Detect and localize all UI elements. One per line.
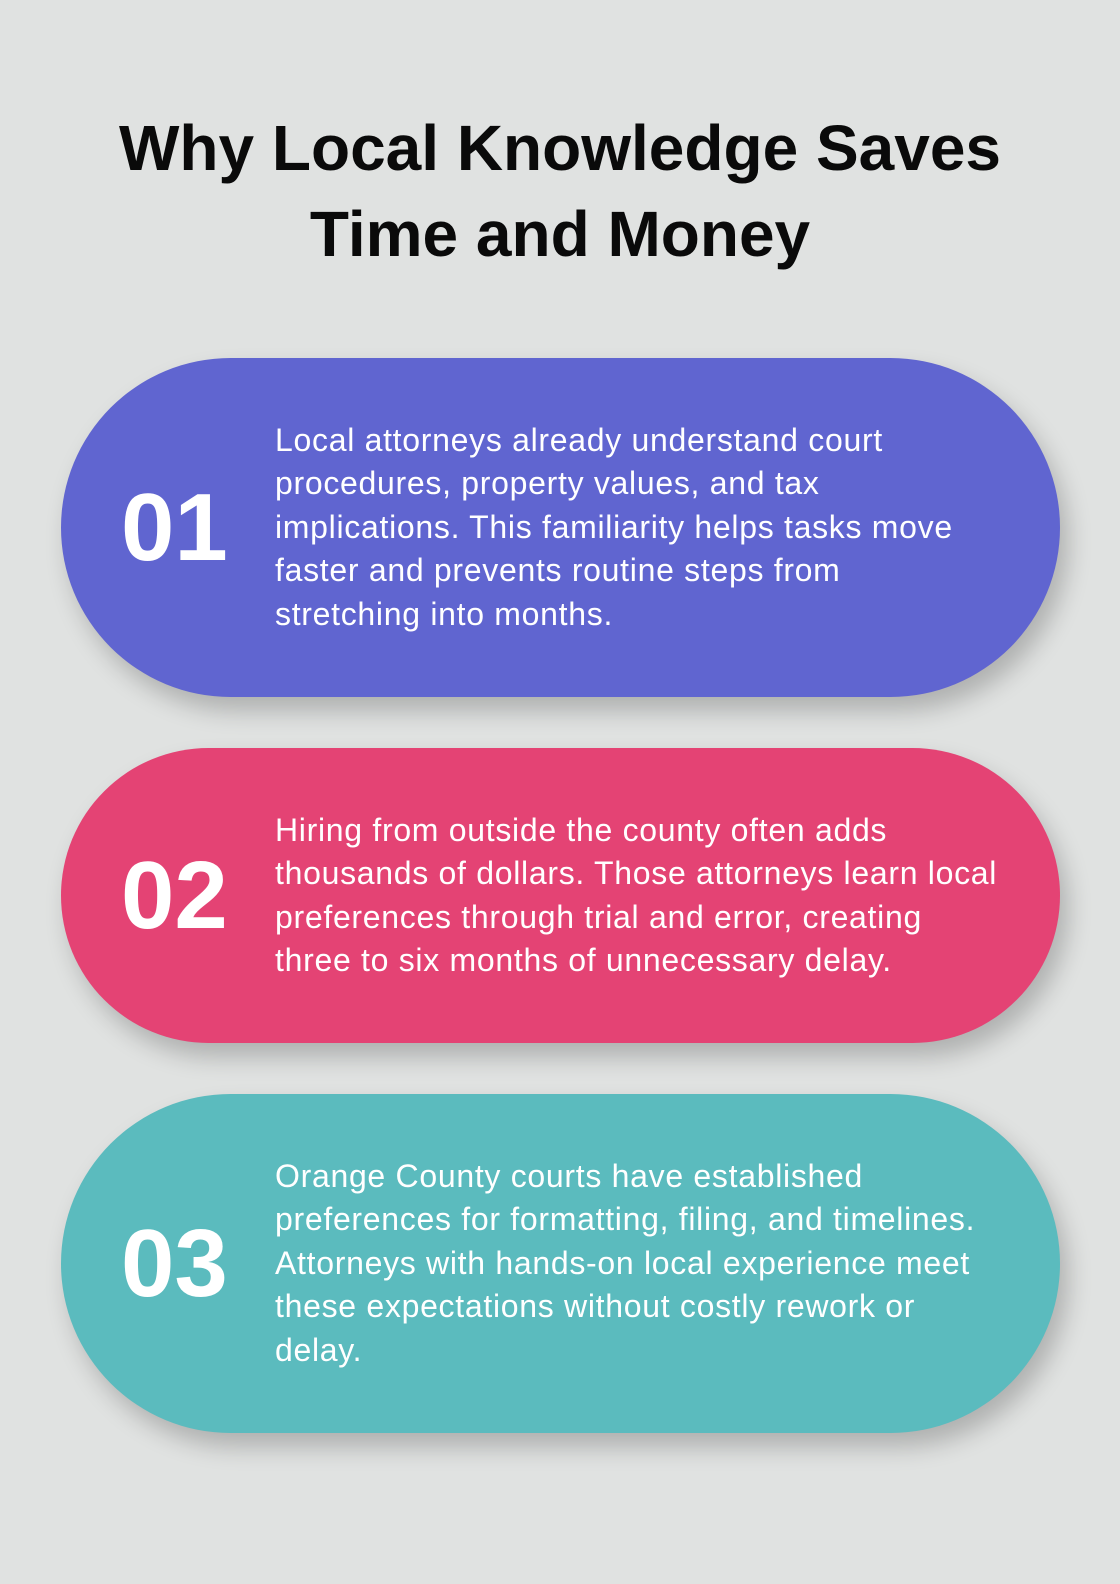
text 02: Hiring from outside the county often adds <box>275 812 887 848</box>
text 03: delay. <box>275 1332 362 1368</box>
text 03: preferences for formatting, filing, and timelines. <box>275 1201 975 1237</box>
text 03 <box>275 1158 975 1368</box>
text 02: three to six months of unnecessary delay. <box>275 942 892 978</box>
text 01: faster and prevents routine steps from <box>275 552 841 588</box>
text 01: procedures, property values, and tax <box>275 465 820 501</box>
title: Time and Money <box>310 198 810 270</box>
text 02: thousands of dollars. Those attorneys learn local <box>275 855 997 891</box>
text 03: Orange County courts have established <box>275 1158 863 1194</box>
panel: 01 <box>61 358 1060 697</box>
text 01: Local attorneys already understand court <box>275 422 883 458</box>
text 03: Attorneys with hands-on local experience meet <box>275 1245 970 1281</box>
number 01: 01 <box>121 474 228 580</box>
text 02 <box>275 812 997 978</box>
text 01 <box>275 422 953 632</box>
text 01: implications. This familiarity helps tasks move <box>275 509 953 545</box>
number 03: 03 <box>121 1210 228 1316</box>
title: Why Local Knowledge Saves <box>119 112 1001 184</box>
title <box>119 112 1001 270</box>
text 02: preferences through trial and error, creating <box>275 898 922 934</box>
panel: 03 <box>61 1094 1060 1433</box>
text 03: these expectations without costly rework or <box>275 1288 915 1324</box>
text 01: stretching into months. <box>275 596 613 632</box>
number 02: 02 <box>121 842 228 948</box>
panel: 02 <box>61 748 1060 1043</box>
